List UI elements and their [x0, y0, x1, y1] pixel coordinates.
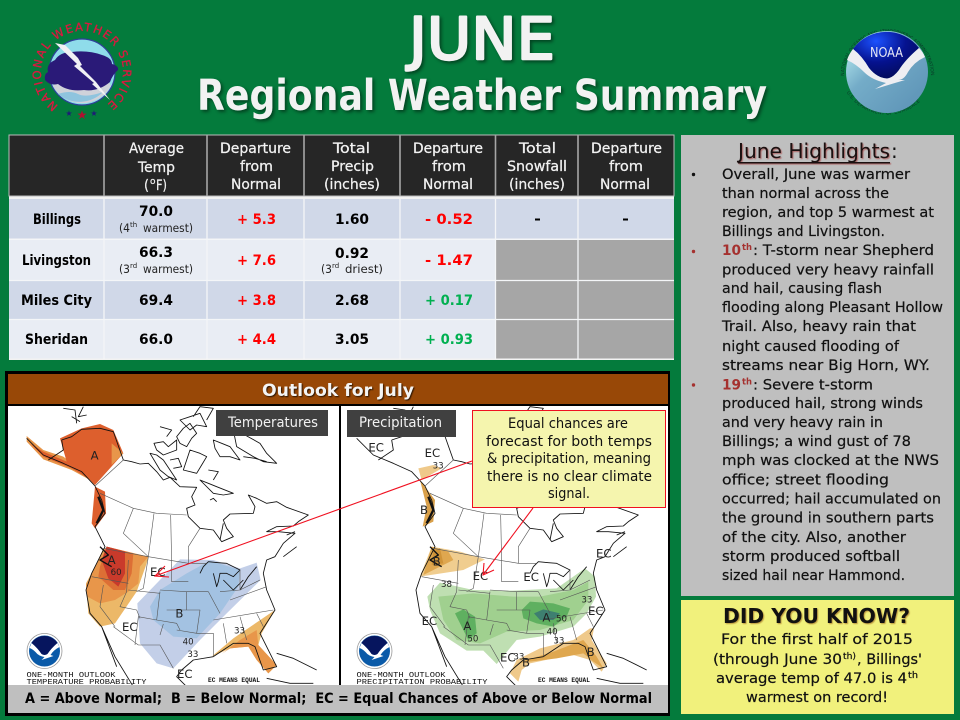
panel: June highlights [681, 135, 954, 596]
bullet 3: June 19th: produced hail, strong winds [722, 396, 923, 412]
map labels: precipitation: 33 [553, 636, 564, 646]
legend bar [8, 685, 668, 713]
row: Livingston: driest) [345, 262, 383, 276]
callout [472, 410, 666, 508]
map labels: temperature: A [91, 448, 99, 462]
table header row: Departure [591, 141, 662, 157]
outlook heading: Outlook for July [262, 381, 414, 401]
map labels: temperature: 40 [183, 637, 194, 647]
row: Miles City [21, 293, 473, 309]
table header row: from [240, 159, 273, 175]
table header row: Total [518, 141, 556, 157]
bullet 2: June 10th: flooding along Pleasant Hollow [722, 300, 943, 316]
title [197, 5, 767, 121]
bullet 3: June 19th: mph was clocked at the NWS [722, 453, 939, 469]
icon: NOAA logo: NOAA [870, 46, 903, 61]
did you know text: th) [843, 652, 856, 662]
legend bar: A = Above Normal; B = Below Normal; EC = Equal Chances of Above or Below Normal [25, 691, 652, 707]
panel: outlook for July [5, 371, 670, 716]
bullet 2: June 10th: : T-storm near Shepherd [753, 243, 934, 259]
row: Billings: 70.0 [139, 204, 173, 220]
table header row: F) [156, 178, 167, 194]
label: Temperatures [216, 410, 328, 436]
icon: National Weather Service logo: ★ [77, 108, 87, 122]
table header row: Snowfall [507, 159, 567, 175]
bullet 2: June 10th: th [742, 243, 752, 253]
callout: there is no clear climate [487, 469, 652, 485]
table header row: from [609, 159, 643, 175]
bullet 3: June 19th: office; street flooding [722, 472, 889, 488]
row: Miles City: + 3.8 [237, 293, 276, 309]
table header row: o [150, 177, 156, 187]
icon: National Weather Service logo: ★ [65, 109, 73, 118]
bullet 2: June 10th: produced very heavy rainfall [722, 262, 934, 278]
row: Billings: (4 [119, 221, 130, 235]
icon: NOAA logo [840, 29, 934, 115]
bullet 2: June 10th: streams near Big Horn, WY. [722, 358, 930, 374]
row: Miles City: + 0.17 [425, 293, 473, 309]
map labels: temperature: 33 [234, 626, 245, 636]
icon: National Weather Service logo: NATIONAL WEATHER SERVICE [32, 22, 132, 112]
row: Livingston: warmest) [143, 262, 193, 276]
highlights heading: June Highlights [736, 139, 890, 163]
map caption: precipitation: EC MEANS EQUAL [538, 677, 590, 684]
callout: Equal chances are [508, 416, 628, 432]
callout: & precipitation, meaning [487, 451, 651, 467]
map labels: precipitation: A [463, 619, 471, 633]
map labels: temperature: B [175, 607, 183, 621]
label: Precipitation [347, 410, 456, 437]
map caption: temperature: EC MEANS EQUAL [208, 677, 260, 684]
map labels: temperature: EC [150, 565, 166, 579]
bullet 3: June 19th: 19 [722, 378, 741, 394]
bullet 2: June 10th [692, 243, 943, 374]
table header row: ( [144, 178, 149, 194]
row: Livingston: (3 [119, 262, 130, 276]
map labels: precipitation: EC [473, 569, 488, 583]
table header row: from [432, 159, 466, 175]
map caption: temperature: TEMPERATURE PROBABILITY [26, 679, 147, 687]
row: Livingston: (3 [321, 262, 332, 276]
table header row [9, 135, 674, 196]
map labels: precipitation: EC [425, 446, 440, 460]
label: Temperatures: Temperatures [227, 415, 318, 431]
icon: NOAA logo: NATIONAL OCEANIC AND ATMOSPHERIC ADMINISTRATION [840, 29, 934, 76]
arrow: callout to precipitation map [483, 508, 533, 575]
map labels: precipitation: 33 [581, 596, 592, 606]
callout: signal. [548, 486, 590, 502]
panel: climate table [9, 135, 674, 360]
bullet 1: overall: Billings and Livingston. [722, 224, 885, 240]
map labels: precipitation: EC [588, 604, 604, 618]
row: Livingston: 66.3 [139, 245, 173, 261]
row: Billings: Billings [33, 212, 81, 228]
table header row: Departure [413, 141, 483, 157]
row: Livingston: + 7.6 [237, 253, 276, 269]
map caption: temperature [26, 672, 260, 684]
title: JUNE [406, 5, 555, 73]
table header row: (inches) [324, 177, 380, 193]
icon: small NOAA logo [27, 634, 62, 668]
map caption: precipitation [356, 672, 590, 684]
table header row: Normal [423, 177, 473, 193]
row: Sheridan: + 0.93 [425, 332, 473, 348]
bullet 3: June 19th: storm produced softball [722, 549, 900, 565]
row: Billings: - 0.52 [425, 212, 473, 228]
row: Billings: warmest) [143, 221, 193, 235]
row: Billings [33, 204, 628, 235]
map labels: precipitation: EC [523, 570, 539, 584]
arrow: callout to temperature map [155, 461, 472, 577]
map labels: temperature: A [108, 553, 116, 567]
row: Livingston: - 1.47 [425, 253, 473, 269]
map labels: precipitation: 33 [433, 462, 444, 472]
bullet 2: June 10th: night caused flooding of [722, 339, 900, 355]
map labels: precipitation: 50 [556, 615, 567, 625]
row: Livingston [22, 245, 473, 276]
map caption: temperature: ONE-MONTH OUTLOOK [26, 672, 116, 680]
icon: small NOAA logo [357, 634, 392, 668]
bullet 3: June 19th: th [742, 378, 752, 388]
table header row: Normal [600, 177, 650, 193]
row: Sheridan: 66.0 [139, 332, 173, 348]
map labels: temperature: 60 [111, 568, 122, 578]
did you know heading: DID YOU KNOW? [723, 604, 910, 628]
callout: forecast for both temps [486, 434, 652, 450]
map labels: precipitation: 50 [467, 635, 478, 645]
row: Livingston: Livingston [22, 253, 91, 269]
bullet 3: June 19th: and very heavy rain in [722, 415, 883, 431]
map labels: precipitation: B [522, 656, 530, 670]
label: Precipitation: Precipitation [359, 415, 442, 431]
bullet 3: June 19th: occurred; hail accumulated on [722, 492, 941, 508]
row backgrounds [9, 199, 674, 359]
row: Billings: 1.60 [335, 212, 369, 228]
icon: NOAA logo: U.S. DEPARTMENT OF COMMERCE [847, 91, 920, 115]
did you know text: For the first half of 2015 [721, 632, 913, 648]
map caption: precipitation: PRECIPITATION PROBABILITY [356, 679, 488, 687]
row: Miles City: 69.4 [139, 293, 173, 309]
did you know text [713, 632, 922, 706]
map labels: precipitation: 33 [513, 652, 524, 662]
map labels: precipitation: EC [368, 441, 384, 455]
bullet 3: June 19th: of the city. Also, another [722, 530, 906, 546]
map caption: precipitation: ONE-MONTH OUTLOOK [356, 672, 446, 680]
map labels: precipitation: B [420, 503, 428, 517]
row: Billings: + 5.3 [237, 212, 276, 228]
bullet 2: June 10th: Trail. Also, heavy rain that [721, 319, 917, 335]
map labels: temperature: 33 [187, 650, 198, 660]
row: Livingston: rd [332, 262, 339, 270]
table header row: Departure [220, 141, 291, 157]
table header row: Normal [231, 177, 281, 193]
row: Sheridan: 3.05 [335, 332, 369, 348]
did you know text: , Billings' [857, 652, 922, 668]
bullet 2: June 10th: 10 [722, 243, 741, 259]
bullet 1: overall: Overall, June was warmer [722, 167, 910, 183]
bullet 1: overall [692, 167, 935, 240]
title: Regional Weather Summary [197, 71, 767, 121]
bullet 3: June 19th [692, 378, 941, 584]
map labels: precipitation: 40 [547, 627, 558, 637]
row: Livingston: rd [130, 262, 137, 270]
did you know text: warmest on record! [746, 690, 888, 706]
did you know text: (through June 30 [713, 652, 842, 668]
row: Livingston: 0.92 [335, 246, 369, 262]
map labels: precipitation: B [587, 645, 595, 659]
map labels: precipitation: EC [500, 651, 516, 665]
map labels: temperature: EC [177, 667, 193, 681]
panel: did you know [681, 600, 954, 714]
bullet 3: June 19th: Billings; a wind gust of 78 [722, 434, 911, 450]
highlights heading: : [891, 139, 898, 163]
table header row: Precip [331, 159, 374, 175]
map: precipitation outlook [341, 406, 668, 687]
row: Sheridan [25, 332, 473, 348]
map labels: temperature: EC [122, 620, 138, 634]
map labels: precipitation: EC [596, 547, 612, 561]
map labels: temperature [91, 448, 245, 681]
table header row: Average [129, 141, 184, 157]
map labels: precipitation: EC [422, 614, 437, 628]
did you know text: th [908, 671, 918, 681]
table header row: Temp [137, 160, 175, 176]
row: Miles City: Miles City [21, 293, 92, 309]
row: Sheridan: + 4.4 [237, 332, 276, 348]
bullet 3: June 19th: the ground in southern parts [722, 510, 934, 526]
icon: National Weather Service logo: ★ [90, 109, 98, 118]
bullet 3: June 19th: : Severe t-storm [753, 378, 873, 394]
did you know text: average temp of 47.0 is 4 [716, 671, 907, 687]
outlook heading [8, 374, 668, 404]
bullet 3: June 19th: sized hail near Hammond. [722, 568, 905, 584]
bullet 2: June 10th: and hail, causing flash [722, 281, 882, 297]
row: Miles City: 2.68 [335, 293, 369, 309]
row: Billings: th [130, 221, 137, 229]
map labels: precipitation: A [542, 610, 550, 624]
table header row: (inches) [509, 177, 565, 193]
map labels: precipitation: B [433, 555, 441, 569]
row: Sheridan: Sheridan [25, 332, 88, 348]
table header row: Total [332, 141, 370, 157]
map: temperature outlook [8, 406, 339, 687]
map labels: precipitation: 38 [441, 580, 452, 590]
bullet 1: overall: than normal across the [722, 186, 889, 202]
map labels: precipitation [368, 441, 612, 670]
bullet 1: overall: region, and top 5 warmest at [722, 205, 935, 221]
